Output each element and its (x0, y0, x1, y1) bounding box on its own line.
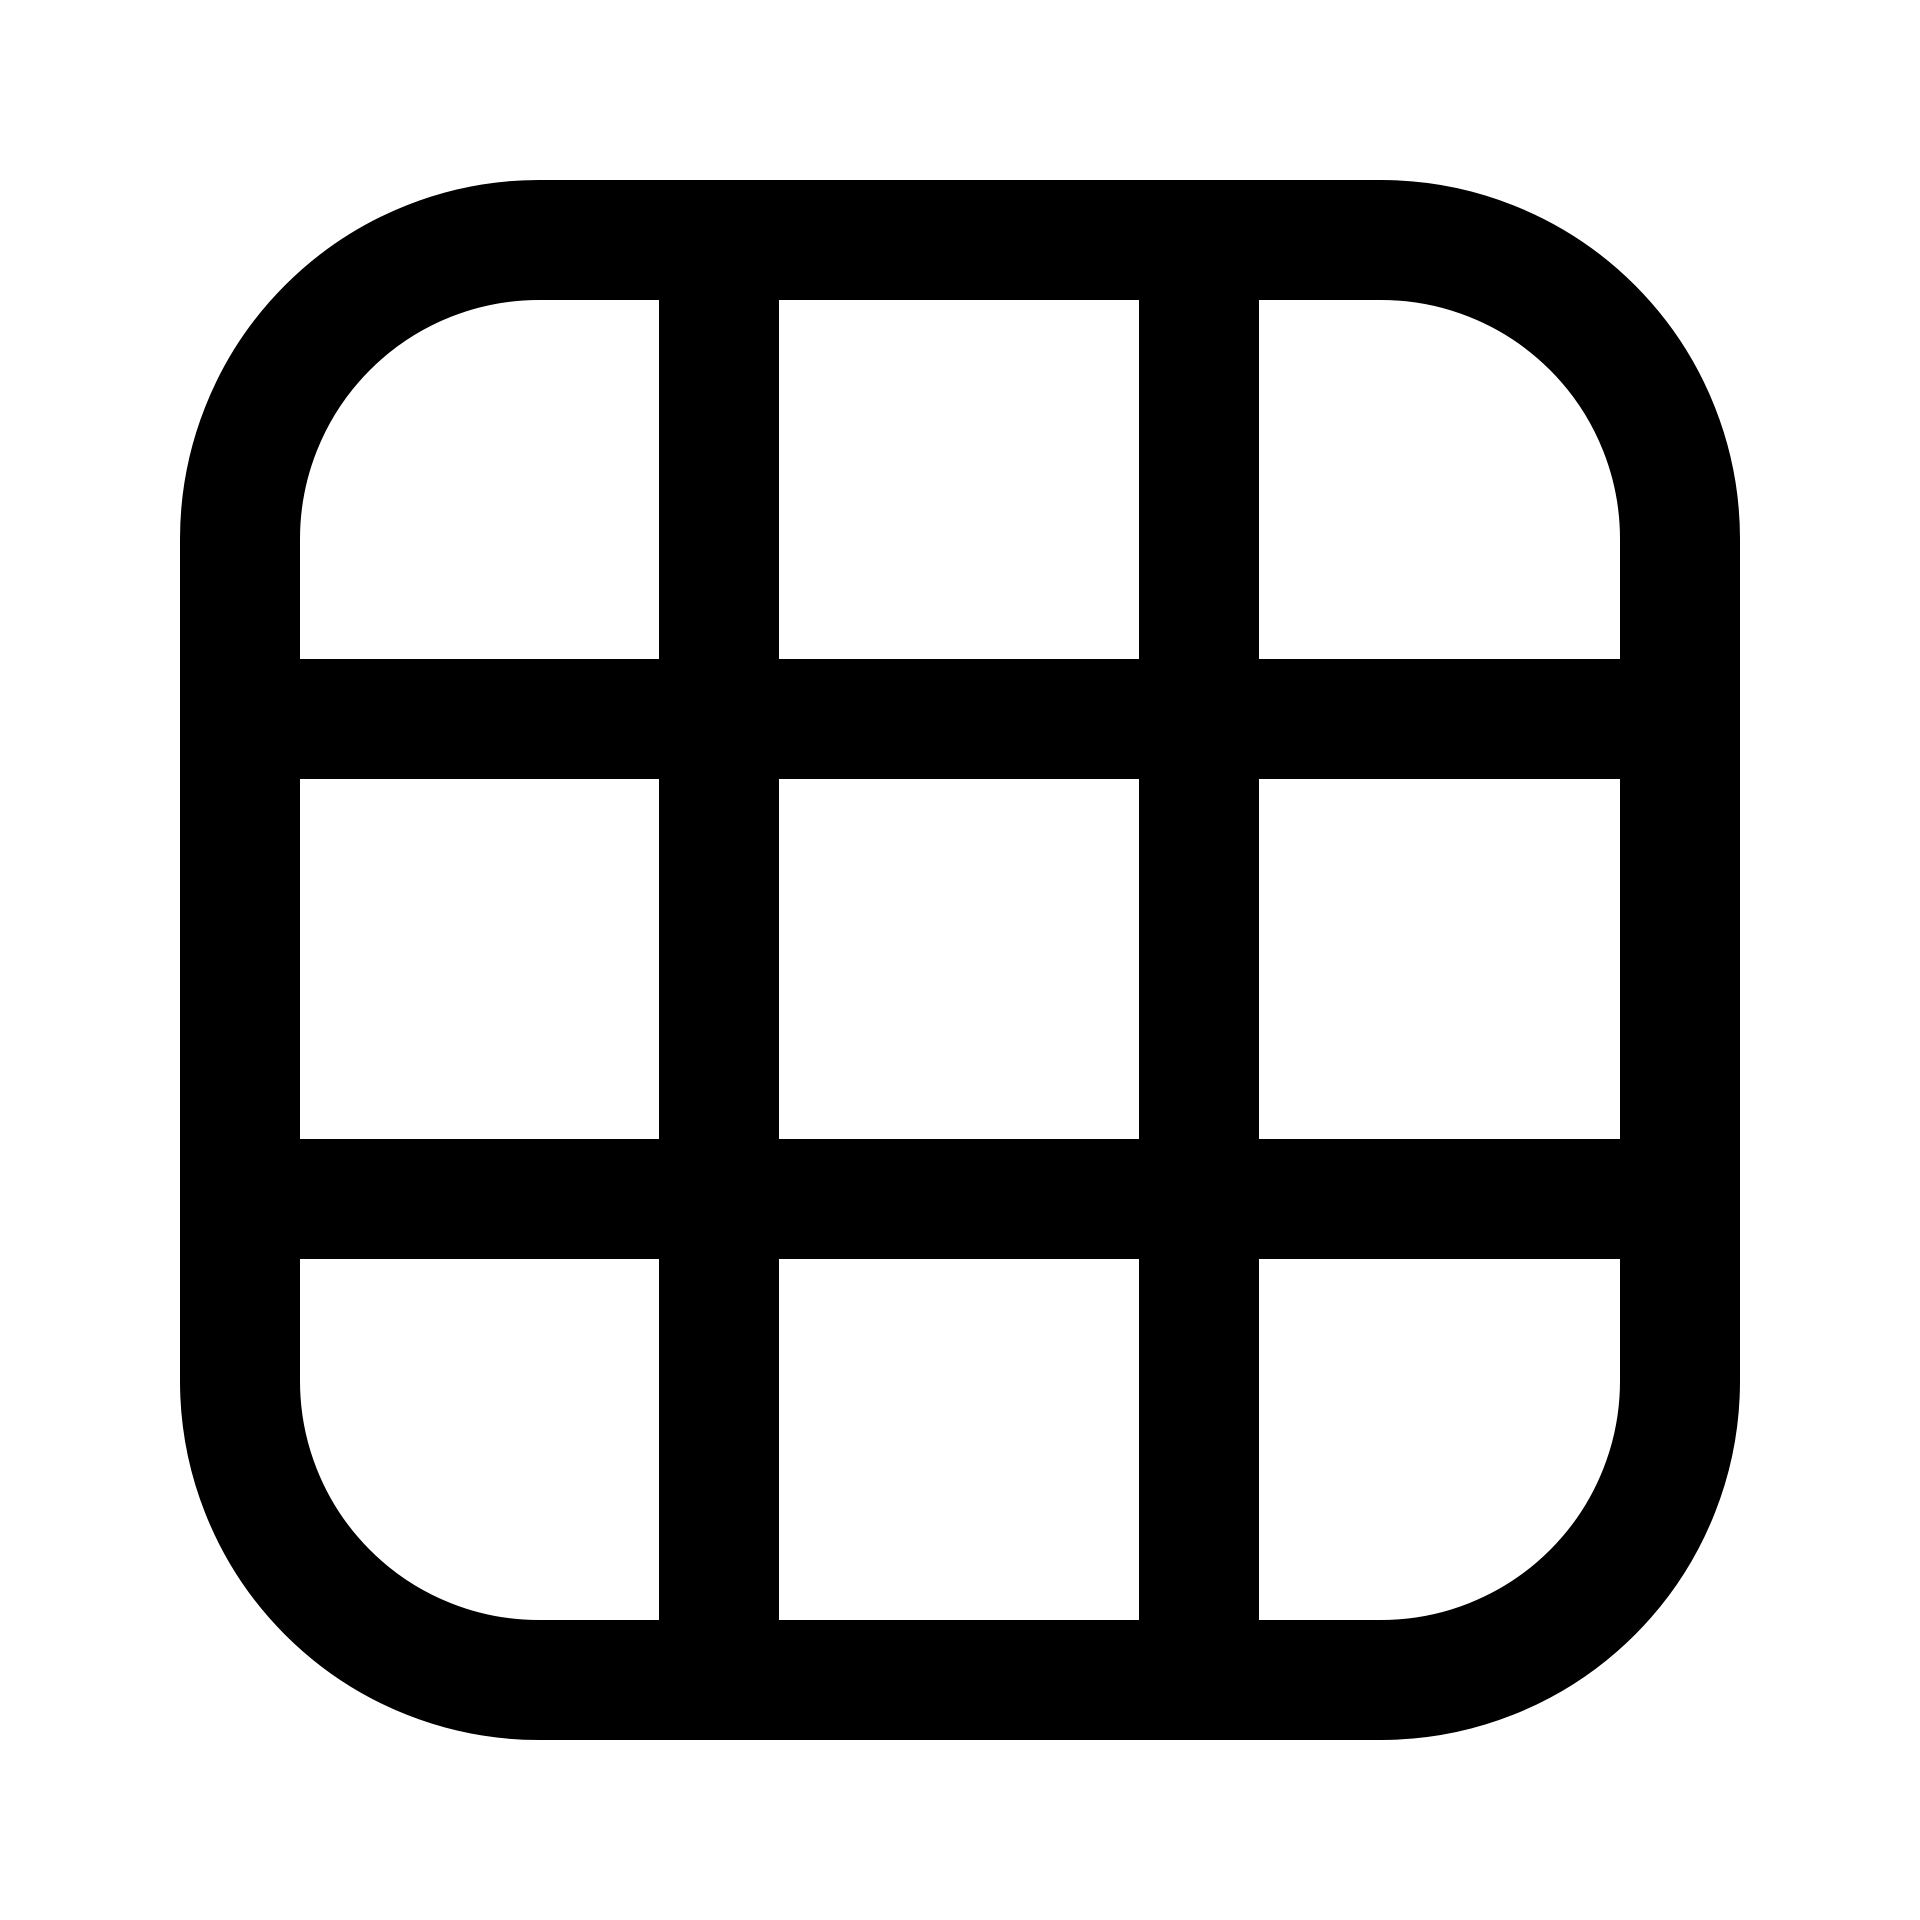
grid lines: vertical dividers (719, 240, 1199, 1680)
icon frame: rounded square outline (240, 240, 1680, 1680)
grid lines: horizontal dividers (240, 719, 1680, 1199)
